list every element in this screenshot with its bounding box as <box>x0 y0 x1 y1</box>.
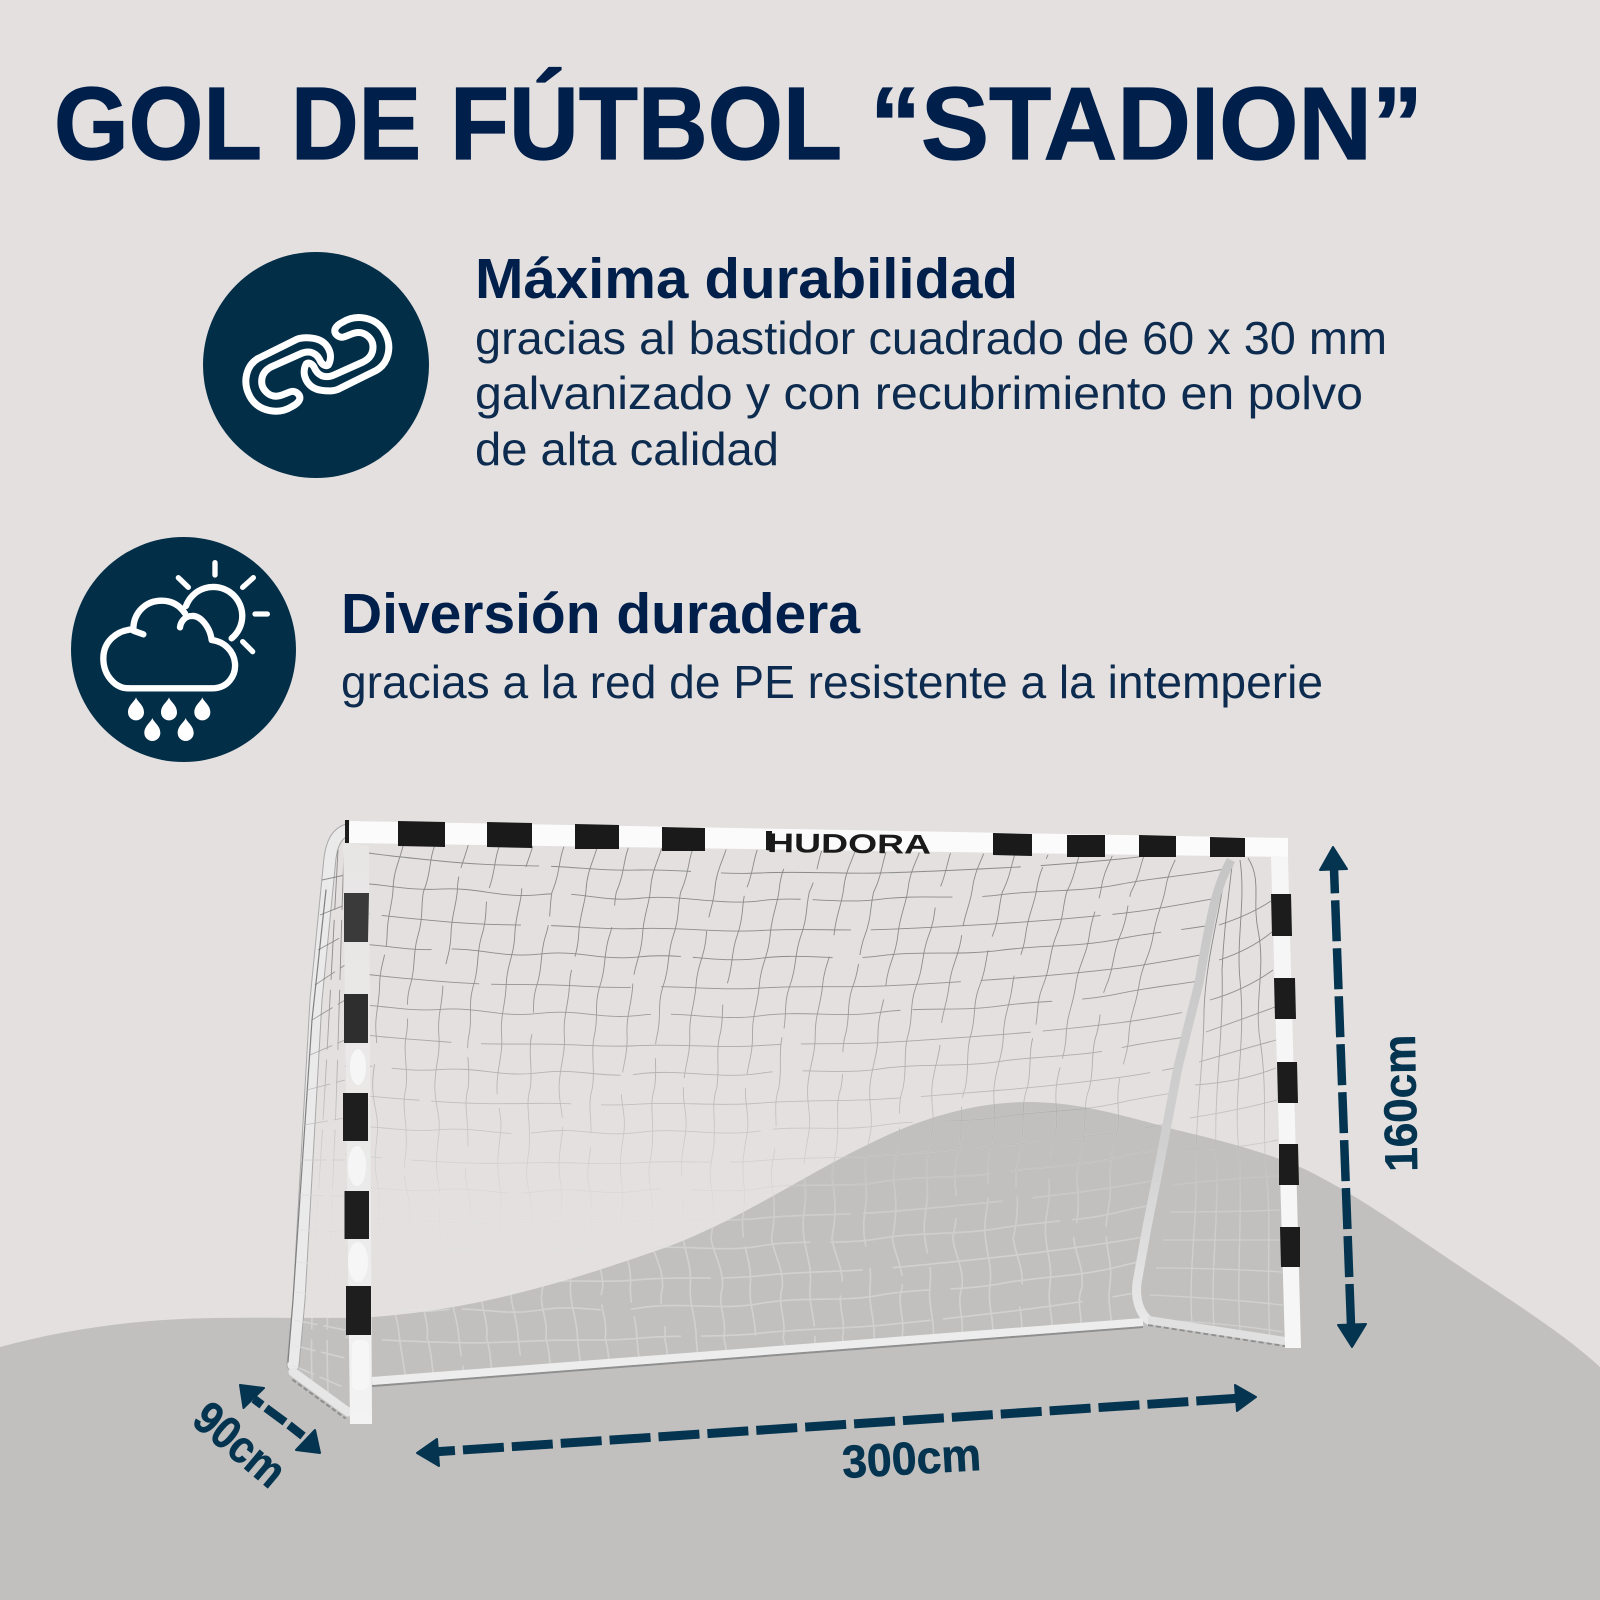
label: 90cm: 90cm <box>184 1391 297 1498</box>
left post with stripes <box>343 843 372 1424</box>
ground hill shape <box>0 1102 1600 1600</box>
soccer goal <box>288 820 1301 1424</box>
heading: Máxima durabilidad: Máxima durabilidad <box>475 247 1018 311</box>
text block: durability description: galvanizado y con recubrimiento en polvo <box>475 367 1363 419</box>
text block: durability description: de alta calidad <box>475 423 779 475</box>
title: GOL <box>54 66 262 181</box>
title <box>54 66 1423 181</box>
feature: maximum durability <box>203 247 1387 478</box>
label: 160cm: 160cm <box>1373 1034 1427 1172</box>
label: 300cm: 300cm <box>841 1428 982 1488</box>
title: DE <box>291 66 421 181</box>
right post with stripes <box>1271 857 1301 1348</box>
title: “STADION” <box>870 66 1423 181</box>
brand logo: HUDORA <box>767 828 931 860</box>
arrow: width <box>417 1385 1256 1466</box>
icon: chain link <box>203 252 429 478</box>
side tube left <box>288 830 348 1418</box>
net <box>292 837 1283 1400</box>
arrow: height <box>1320 847 1366 1347</box>
bottom bars <box>372 1320 1285 1386</box>
text block: durability description <box>475 312 1387 475</box>
icon: sun, cloud and rain <box>71 537 296 762</box>
title: FÚTBOL <box>450 66 842 181</box>
heading: Diversión duradera: Diversión duradera <box>341 582 861 646</box>
text block: net description: gracias a la red de PE resistente a la intemperie <box>341 656 1323 708</box>
back frame tube right <box>1137 860 1231 1322</box>
arrow: depth <box>240 1385 320 1453</box>
text block: durability description: gracias al bastidor cuadrado de 60 x 30 mm <box>475 312 1387 364</box>
crossbar with stripes <box>345 820 1288 860</box>
feature: lasting fun <box>71 537 1323 762</box>
